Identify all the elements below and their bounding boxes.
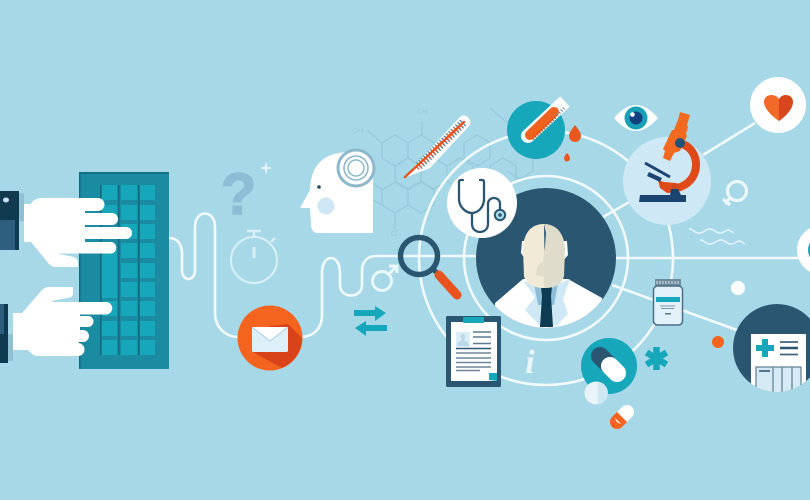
shirt <box>523 279 570 326</box>
icon: medicine bottle <box>654 279 682 325</box>
inner ring <box>464 176 628 340</box>
icon: eye <box>614 105 658 131</box>
icon: blood drops <box>564 125 581 162</box>
wavy connector mail to magnifier <box>300 256 476 337</box>
icon: stethoscope circle <box>447 168 517 238</box>
dots <box>712 281 745 348</box>
icon: magnifying glass <box>400 238 457 295</box>
info symbol: i <box>525 344 535 381</box>
head <box>523 224 545 288</box>
icon: venus symbol <box>723 182 746 205</box>
upper hand with cuff <box>0 191 132 267</box>
question mark: ? <box>221 162 256 227</box>
wavy connector keyboard to mail <box>169 214 239 337</box>
icon: round tablet <box>584 382 608 404</box>
icon: exchange arrows <box>354 306 387 336</box>
molecule hexagon pattern: OH <box>353 128 363 135</box>
icon: male symbol <box>372 266 397 290</box>
spoke lines <box>603 123 802 330</box>
molecule hexagon pattern: Cl <box>391 231 398 238</box>
connector network lines <box>169 123 802 385</box>
molecule hexagon pattern: CH <box>417 109 427 116</box>
decorative squiggles <box>689 229 745 244</box>
coat <box>495 279 602 328</box>
keyboard <box>79 172 169 369</box>
outer ring <box>419 131 673 385</box>
lower hand with cuff <box>0 287 112 363</box>
icon: clipboard <box>446 316 501 387</box>
icon: test tube circle <box>507 101 565 159</box>
doctor portrait <box>476 188 616 340</box>
icon: mail circle <box>238 306 303 371</box>
molecule hexagon pattern <box>353 108 533 238</box>
tie <box>540 287 553 327</box>
icon: pill circle <box>581 338 637 394</box>
icon: stopwatch <box>231 231 277 283</box>
icon: thermometer <box>404 116 470 178</box>
sparkle <box>259 161 273 175</box>
icon: hospital chart circle <box>733 304 810 397</box>
icon: heart circle <box>750 77 806 133</box>
icon: capsule <box>617 412 627 422</box>
icon: asterisk <box>646 347 666 370</box>
icon: microscope circle <box>623 112 711 225</box>
icon: right edge circle <box>797 225 810 275</box>
ears <box>521 241 568 261</box>
icon: head with spiral <box>300 150 374 233</box>
